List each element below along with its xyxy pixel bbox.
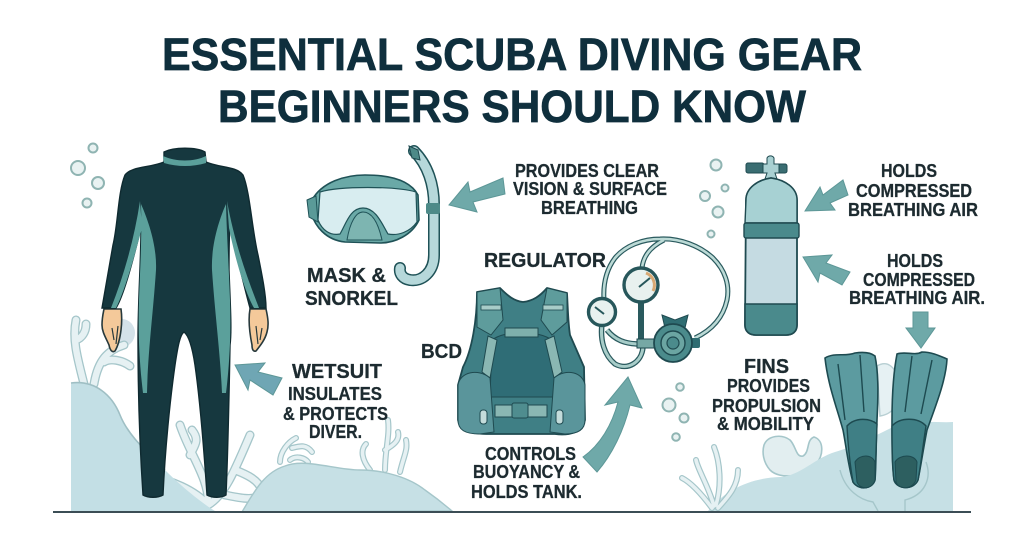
snorkel <box>400 151 434 280</box>
suit body <box>102 148 266 497</box>
seabed and corals: left <box>71 319 452 512</box>
label and text: fins: FINS <box>744 356 789 378</box>
arrow: to tank lower <box>803 255 850 285</box>
seabed and corals: right <box>682 364 953 511</box>
bubbles: left <box>71 144 104 208</box>
text: BCD description: CONTROLS <box>485 444 576 464</box>
small gauge <box>588 298 616 326</box>
text: BCD description <box>471 444 582 502</box>
title <box>162 29 862 132</box>
right fin <box>892 352 947 488</box>
bubbles: upper middle <box>700 160 728 238</box>
text: tank description upper: COMPRESSED <box>856 181 972 201</box>
bubbles: lower middle <box>662 383 688 441</box>
label and text: fins: PROPULSION <box>712 396 821 416</box>
large gauge <box>624 268 658 302</box>
arrow: to fins <box>906 312 935 348</box>
ground line <box>53 511 971 513</box>
title: BEGINNERS SHOULD KNOW <box>218 81 806 132</box>
text: tank description lower: HOLDS <box>887 251 943 271</box>
text: tank description upper: BREATHING AIR <box>848 200 978 220</box>
label and text: fins: & MOBILITY <box>717 414 814 434</box>
icon: wetsuit <box>102 148 268 497</box>
label: BCD: BCD <box>421 341 462 363</box>
text: BCD description: BUOYANCY & <box>473 462 580 482</box>
text: tank description lower <box>849 251 985 308</box>
text: tank description upper: HOLDS <box>881 161 937 181</box>
collar <box>163 156 206 166</box>
icon: BCD vest <box>458 288 585 434</box>
arrow: to tank upper <box>805 180 848 211</box>
icon: scuba tank <box>744 156 799 335</box>
label: mask and snorkel <box>305 265 398 310</box>
arrow: to wetsuit <box>235 363 282 395</box>
text: mask description: BREATHING <box>541 198 638 218</box>
hoses <box>602 239 728 366</box>
text: tank description upper <box>848 161 978 220</box>
arrow: curved to regulator <box>583 377 642 472</box>
icon: fins <box>825 352 947 488</box>
label: regulator: REGULATOR <box>484 250 607 272</box>
hands <box>102 309 268 352</box>
label and text: fins <box>712 356 821 434</box>
label and text: fins: PROVIDES <box>727 376 810 396</box>
arrow: to snorkel <box>449 178 505 212</box>
label and text: wetsuit: INSULATES <box>288 384 382 404</box>
tank band <box>744 223 799 238</box>
title: ESSENTIAL SCUBA DIVING GEAR <box>162 29 862 80</box>
icon: mask and snorkel <box>307 146 440 280</box>
text: tank description lower: BREATHING AIR. <box>849 288 985 308</box>
left fin <box>825 352 878 488</box>
first stage <box>637 315 700 362</box>
text: tank description lower: COMPRESSED <box>863 270 975 290</box>
valve <box>746 156 787 179</box>
text: BCD description: HOLDS TANK. <box>471 482 582 502</box>
label and text: wetsuit: & PROTECTS <box>283 404 388 424</box>
mask <box>312 175 419 243</box>
tank boot <box>745 304 797 335</box>
label: mask and snorkel: SNORKEL <box>305 288 398 310</box>
text: mask description <box>513 161 667 218</box>
text: mask description: VISION & SURFACE <box>513 179 667 199</box>
icon: regulator with gauges <box>588 239 728 366</box>
label: mask and snorkel: MASK & <box>307 265 386 287</box>
label and text: wetsuit: DIVER. <box>309 422 362 442</box>
side stripes <box>111 201 156 393</box>
cylinder <box>745 178 797 335</box>
label and text: wetsuit: WETSUIT <box>292 361 382 383</box>
text: mask description: PROVIDES CLEAR <box>515 161 659 181</box>
label and text: wetsuit <box>283 361 388 442</box>
